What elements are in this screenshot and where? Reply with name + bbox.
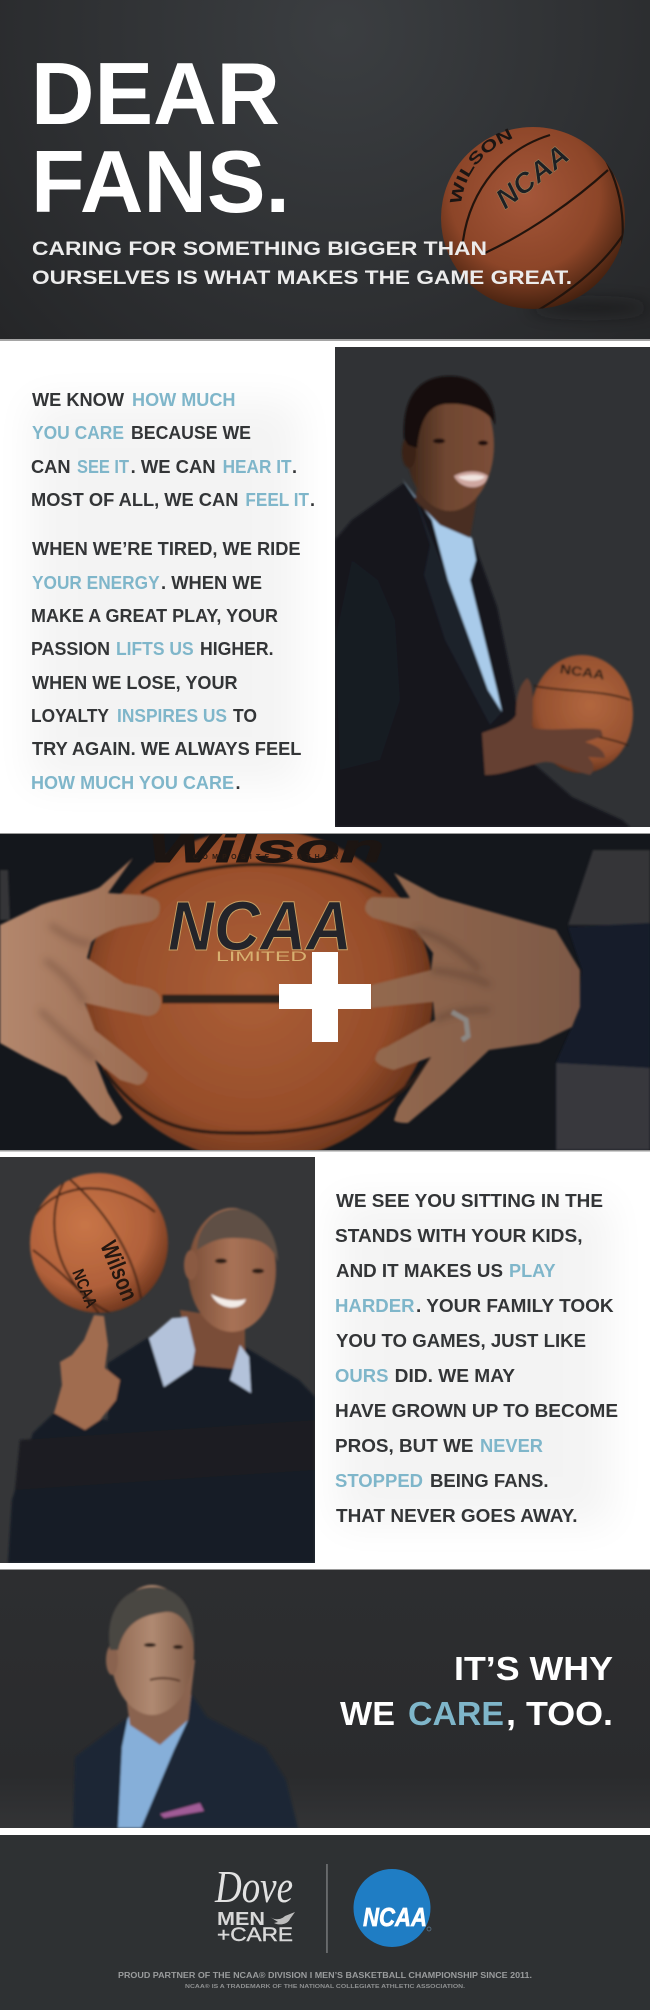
- photo: man spinning basketball: [0, 1157, 315, 1563]
- legal text: NCAA® IS A TRADEMARK OF THE NATIONAL COLLEGIATE ATHLETIC ASSOCIATION.: [185, 1983, 466, 1990]
- basketball: hero: WILSON: [450, 128, 512, 202]
- text block: we see you: STANDS WITH YOUR KIDS,: [335, 1226, 582, 1246]
- basketball: hero: [441, 127, 625, 312]
- text block: we see you: OURS: [335, 1366, 388, 1386]
- text block: we see you: AND IT MAKES US: [336, 1261, 503, 1281]
- jacket: [335, 483, 630, 827]
- right hand: [365, 873, 580, 1123]
- panel: hero: [0, 0, 650, 339]
- photo: hands gripping NCAA basketball with plus: [0, 827, 650, 1161]
- text block: we see you: THAT NEVER GOES AWAY.: [336, 1506, 578, 1526]
- text block: we know how much you care: HEAR IT: [223, 457, 292, 477]
- panel: closing banner: [0, 1570, 650, 1828]
- hand: [482, 678, 605, 775]
- text block: when we're tired: WHEN WE LOSE, YOUR: [32, 673, 238, 693]
- text block: we know how much you care: SEE IT: [77, 457, 129, 477]
- logo: Dove Men+Care: [214, 1862, 295, 1946]
- subtitle: OURSELVES IS WHAT MAKES THE GAME GREAT.: [32, 267, 572, 289]
- text block: we see you: DID. WE MAY: [395, 1366, 515, 1386]
- logo: Dove Men+Care: MEN: [217, 1909, 265, 1929]
- closing headline: [340, 1650, 613, 1732]
- text block: we know how much you care: YOU CARE: [32, 423, 124, 443]
- hand: [54, 1315, 120, 1430]
- panel: second letter text: [335, 1191, 618, 1526]
- text block: when we're tired: LOYALTY: [31, 706, 109, 726]
- text block: when we're tired: TO: [233, 706, 257, 726]
- text block: when we're tired: WHEN WE’RE TIRED, WE RIDE: [32, 539, 301, 559]
- subtitle: CARING FOR SOMETHING BIGGER THAN: [32, 238, 487, 260]
- text block: we know how much you care: FEEL IT: [245, 490, 309, 510]
- text block: we see you: STOPPED: [335, 1471, 423, 1491]
- legal text: PROUD PARTNER OF THE NCAA® DIVISION I MEN’S BASKETBALL CHAMPIONSHIP SINCE 2011.: [118, 1971, 532, 1980]
- text block: we see you: WE SEE YOU SITTING IN THE: [336, 1191, 603, 1211]
- text block: we see you: BEING FANS.: [430, 1471, 548, 1491]
- title: FANS.: [31, 132, 290, 231]
- text block: we see you: . YOUR FAMILY TOOK: [416, 1296, 614, 1316]
- logo: Dove Men+Care: +CARE: [217, 1924, 293, 1946]
- text block: we know how much you care: WE KNOW: [32, 390, 124, 410]
- basketball: hero: NCAA: [490, 139, 575, 215]
- title: DEAR: [31, 44, 280, 143]
- closing headline: IT’S WHY: [454, 1650, 613, 1687]
- text block: we know how much you care: . WE CAN: [131, 457, 216, 477]
- text block: when we're tired: .: [236, 773, 241, 793]
- basketball: [30, 1173, 168, 1313]
- text block: when we're tired: [31, 539, 301, 793]
- text block: we know how much you care: BECAUSE WE: [131, 423, 251, 443]
- text block: we see you: YOU TO GAMES, JUST LIKE: [336, 1331, 586, 1351]
- logo: Dove Men+Care: Dove: [214, 1862, 293, 1912]
- photo: man in blazer holding basketball: [335, 347, 650, 827]
- text block: we see you: [335, 1191, 618, 1526]
- text block: we know how much you care: [31, 390, 315, 510]
- text block: when we're tired: HIGHER.: [200, 639, 274, 659]
- text block: we know how much you care: HOW MUCH: [132, 390, 236, 410]
- shirt: [402, 478, 502, 712]
- text block: when we're tired: TRY AGAIN. WE ALWAYS FEEL: [32, 739, 301, 759]
- sleeve: [556, 923, 650, 1068]
- ball: [85, 829, 433, 1161]
- panel: first letter text: [30, 390, 315, 793]
- closing headline: CARE: [408, 1695, 504, 1732]
- text block: we see you: PLAY: [509, 1261, 556, 1281]
- text block: when we're tired: INSPIRES US: [117, 706, 227, 726]
- closing headline: WE: [340, 1695, 395, 1732]
- text block: when we're tired: HOW MUCH YOU CARE: [31, 773, 234, 793]
- text block: we see you: PROS, BUT WE: [335, 1436, 474, 1456]
- neck: [180, 1310, 245, 1370]
- plus sign: [279, 952, 371, 1042]
- text block: we know how much you care: CAN: [31, 457, 70, 477]
- collar: [149, 1317, 195, 1387]
- head: [188, 1208, 276, 1332]
- text block: we see you: HAVE GROWN UP TO BECOME: [335, 1401, 618, 1421]
- text block: when we're tired: MAKE A GREAT PLAY, YOUR: [31, 606, 278, 626]
- NCAA wordmark: NCAA: [168, 887, 352, 965]
- photo: man in suit: [73, 1585, 298, 1828]
- ring: [452, 1012, 468, 1040]
- title: [36, 63, 284, 213]
- closing headline: , TOO.: [506, 1695, 613, 1732]
- text block: we know how much you care: .: [310, 490, 315, 510]
- text block: when we're tired: PASSION: [31, 639, 110, 659]
- photo: man in blazer holding basketball: NCAA: [559, 661, 606, 682]
- photo: man spinning basketball: Wilson: [94, 1237, 143, 1305]
- photo: man spinning basketball: NCAA: [68, 1266, 101, 1311]
- background patches: [568, 850, 650, 925]
- photo: hands gripping NCAA basketball with plus: COMPOSITE LEATHER: [193, 854, 338, 861]
- text block: we see you: NEVER: [480, 1436, 543, 1456]
- head: [414, 490, 477, 539]
- text block: when we're tired: LIFTS US: [116, 639, 194, 659]
- left hand: [0, 858, 161, 1125]
- logo: NCAA: [354, 1869, 431, 1947]
- pocket square: [160, 1803, 204, 1818]
- photo: hands gripping NCAA basketball with plus: LIMITED: [216, 948, 307, 964]
- text block: we see you: HARDER: [335, 1296, 415, 1316]
- logo: NCAA: NCAA: [363, 1902, 427, 1932]
- text block: when we're tired: YOUR ENERGY: [32, 573, 160, 593]
- panel: footer: [0, 1835, 650, 2010]
- wilson wordmark: Wilson: [148, 827, 384, 871]
- text block: we know how much you care: MOST OF ALL, WE CAN: [31, 490, 238, 510]
- basketball: [531, 655, 633, 773]
- sweater: [8, 1337, 315, 1563]
- subtitle: [32, 242, 570, 284]
- legal text: [118, 1971, 532, 1990]
- text block: we know how much you care: .: [292, 457, 297, 477]
- text block: when we're tired: . WHEN WE: [161, 573, 262, 593]
